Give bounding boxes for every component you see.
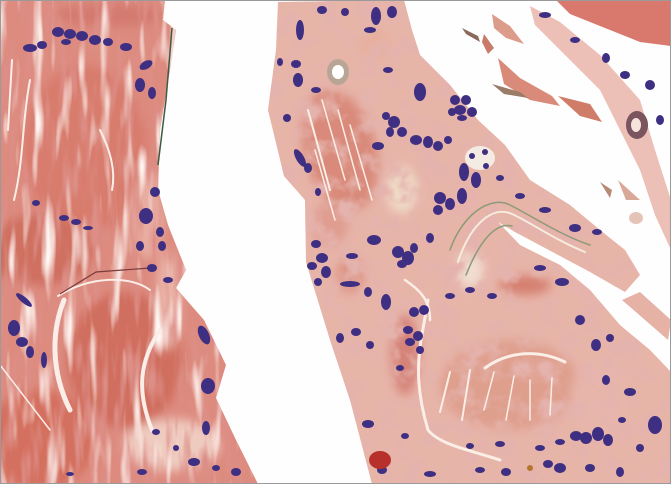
pigment granule xyxy=(527,465,533,471)
nuclei: central tissue xyxy=(277,6,662,477)
fibre clefts xyxy=(308,100,565,460)
red blood cell cluster xyxy=(369,451,391,469)
fibre clefts xyxy=(0,60,160,430)
vessel lumen xyxy=(631,118,641,132)
small capillary with nuclei xyxy=(465,146,495,170)
panel: central tissue band xyxy=(260,0,671,484)
muscle fragment top right xyxy=(556,0,671,46)
panel: left muscle tissue xyxy=(0,0,260,484)
nuclei: left tissue xyxy=(8,27,241,476)
vessel: round lumen xyxy=(327,59,349,85)
fibre texture xyxy=(0,0,260,484)
wavy collagen fibres xyxy=(450,202,590,275)
lower right thin fibres xyxy=(622,292,671,340)
panel: upper right tissue strip xyxy=(530,0,671,250)
nuclei: strip xyxy=(539,12,664,125)
vessel in strip xyxy=(626,111,648,139)
tissue fragments upper right xyxy=(462,14,643,224)
mottled stroma texture xyxy=(269,1,634,430)
